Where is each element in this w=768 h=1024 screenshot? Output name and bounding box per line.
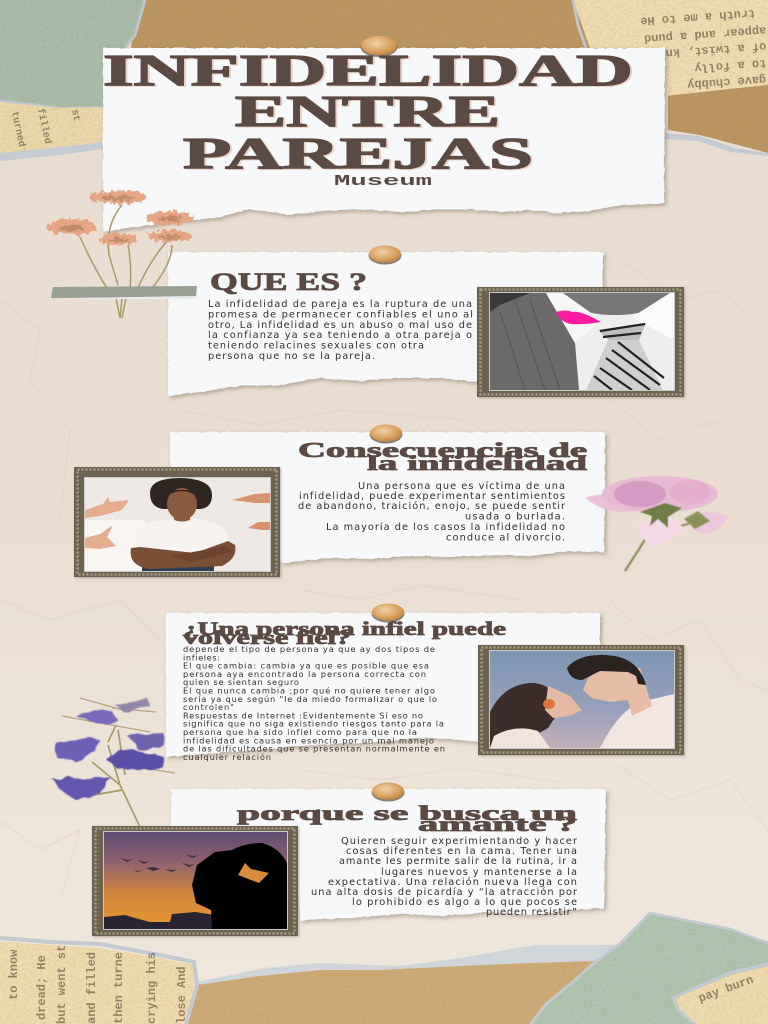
torn paper: top-right newspaper: gave chubby <box>687 72 767 92</box>
torn paper: bottom-right green <box>531 913 768 1024</box>
body text: La mayoría de los casos la infidelidad no <box>326 521 565 533</box>
body text: usada o burlada. <box>465 512 565 522</box>
torn paper: top-right newspaper: truth a me to He <box>640 6 756 28</box>
torn paper: bottom-right newspaper: pay burn <box>697 973 756 1006</box>
torn paper: bottom-left newspaper: to know <box>7 949 21 1000</box>
torn paper: bottom-left newspaper <box>0 938 197 1024</box>
icon: purple flower <box>50 698 175 827</box>
torn paper: top brown <box>130 0 768 156</box>
torn paper: left newspaper: st <box>68 109 81 123</box>
heading <box>298 438 588 475</box>
body text: cualquier relación <box>183 752 271 762</box>
pin: amante <box>372 782 404 802</box>
body text: El que nunca cambia ;por qué no quiere tener algo <box>183 686 435 696</box>
heading: amante ? <box>418 812 577 836</box>
body text: sería ya que según "le da miedo formalizar o que lo <box>183 694 437 704</box>
heading <box>237 801 578 836</box>
torn paper: bottom-left newspaper: dread; He <box>35 955 49 1020</box>
panel: volverse fiel <box>166 613 600 762</box>
torn paper: top-right newspaper: to a folly <box>694 56 767 75</box>
title paper <box>103 48 665 232</box>
title card <box>103 46 665 232</box>
body text: de abandono, traición, enojo, se puede sentir <box>298 500 566 512</box>
photo frame: sunset silhouette <box>92 826 298 936</box>
torn paper: bottom brown <box>185 945 615 1024</box>
body text: la confianza ya sea teniendo a otra pareja o <box>208 330 472 341</box>
torn paper: bottom-left newspaper: and filled <box>85 952 99 1024</box>
panel paper <box>168 252 603 396</box>
title text: INFIDELIDAD <box>103 46 633 95</box>
torn paper: bottom-left newspaper: but went st <box>55 945 69 1024</box>
heading: Consecuencias de <box>298 438 587 462</box>
body text: lo prohibido es algo a lo que pocos se <box>352 897 577 908</box>
heading: volverse fiel? <box>183 628 351 649</box>
torn paper: left newspaper: turned <box>8 110 27 148</box>
torn paper: top-right newspaper: of a twist, know <box>650 39 767 61</box>
icon: orange flowers with tape <box>47 190 197 318</box>
panel: consecuencias <box>170 432 605 563</box>
washi tape <box>51 286 197 298</box>
body text: La infidelidad de pareja es la ruptura de una <box>208 299 472 310</box>
pin: que es <box>368 246 402 264</box>
body text: lugares nuevos y mantenerse a la <box>381 867 577 878</box>
body text: quien se sientan seguro <box>183 677 299 687</box>
body text: pueden resistir” <box>486 907 577 918</box>
body text: controlen" <box>183 702 234 712</box>
heading <box>183 619 506 649</box>
body text: significa que no siga existiendo riesgos tanto para la <box>183 719 444 729</box>
heading: ¿Una persona infiel puede <box>183 619 506 640</box>
photo frame: woman and pointing hands <box>74 467 280 577</box>
body text: cosas diferentes en la cama. Tener una <box>346 846 577 857</box>
body text: Quieren seguir experimientando y hacer <box>341 836 578 847</box>
panel: que es <box>168 252 603 396</box>
subtitle: Museum <box>334 173 432 190</box>
photo frame: couple <box>478 645 684 755</box>
body text: Respuestas de Internet :Evidentemente Sí eso no <box>183 710 423 720</box>
torn paper: top-right newspaper <box>573 0 768 96</box>
body text: persona aya encontrado la persona correcta con <box>183 669 426 679</box>
body text: de las dificultades que se presentan normalmente en <box>183 744 445 754</box>
icon: pink flower <box>585 476 728 571</box>
photo frame: tie and lipstick <box>477 271 684 397</box>
torn paper: left newspaper: filled <box>34 107 53 145</box>
body text: El que cambia: cambia ya que es posible que esa <box>183 661 429 671</box>
body text: conduce al divorcio. <box>446 532 565 544</box>
body text: otro, La infidelidad es un abuso o mal uso de <box>208 320 472 331</box>
body text: persona que no se la pareja. <box>208 351 375 362</box>
title text: PAREJAS <box>183 129 533 178</box>
title text: ENTRE <box>235 87 500 136</box>
heading: QUE ES ? <box>210 269 367 296</box>
body text <box>311 836 578 918</box>
body text: promesa de permanecer confiables el uno al <box>208 310 473 320</box>
pin: volverse fiel <box>372 604 404 622</box>
panel paper <box>166 613 600 757</box>
body text <box>208 299 473 362</box>
title text: PAREJAS <box>185 130 535 179</box>
title text: ENTRE <box>237 88 502 137</box>
heading: la infidelidad <box>367 451 588 475</box>
body text: infidelidad, puede experimentar sentimientos <box>299 491 565 502</box>
panel paper <box>170 432 605 563</box>
title text <box>103 46 635 179</box>
pin: title <box>360 36 398 57</box>
body text: infidelidad es causa en esencia por un mal manejo <box>183 735 434 745</box>
body text: depende el tipo de persona ya que ay dos tipos de <box>183 644 435 654</box>
torn paper: bottom-left newspaper: lose And <box>175 966 189 1024</box>
body text <box>183 644 445 762</box>
torn paper: bottom-left newspaper: then turne <box>112 952 126 1024</box>
body text: teniendo relacines sexuales con otra <box>208 340 424 352</box>
panel paper <box>171 789 606 920</box>
pin: consecuencias <box>370 424 402 444</box>
panel: amante <box>171 789 606 920</box>
body text: persona que ha sido infiel como para que no la <box>183 727 417 737</box>
body text: expectativa. Una relación nueva llega con <box>328 876 577 888</box>
body text: Una persona que es víctima de una <box>358 480 565 492</box>
torn paper: bottom-left newspaper: crying his <box>145 952 159 1024</box>
torn paper: top-right newspaper: appear and a pund <box>644 23 767 46</box>
body text: infieles: <box>183 652 220 662</box>
body text: amante les permite salir de la rutina, ir a <box>339 856 577 867</box>
title text: INFIDELIDAD <box>105 47 635 96</box>
body text: una alta dosis de picardía y “la atracción por <box>311 886 578 898</box>
heading: porque se busca un <box>237 801 578 825</box>
torn paper: bottom-right newspaper <box>673 964 768 1024</box>
torn paper: top-left green <box>0 0 145 108</box>
body text <box>298 480 566 544</box>
torn paper: left newspaper <box>0 102 103 161</box>
